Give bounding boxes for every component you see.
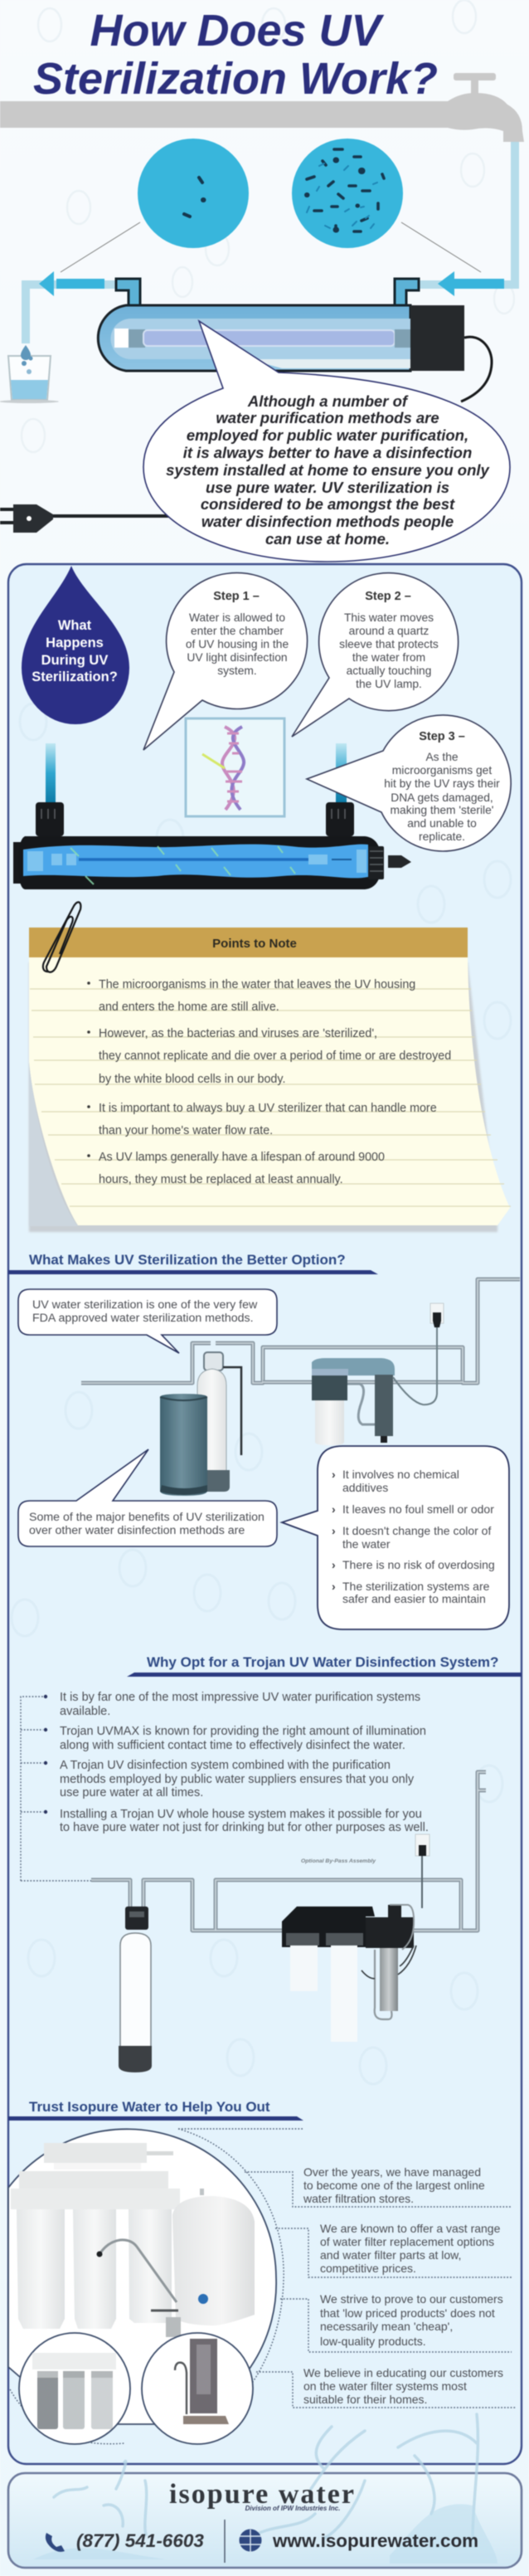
illustration: UV beam tubes <box>46 743 347 803</box>
illustration: simple UV chamber <box>98 279 492 402</box>
panel: points to note: than your home's water flow rate. <box>99 1124 273 1137</box>
text block: replacement options: competitive prices. <box>320 2262 416 2275</box>
icon: water drop heading: During UV <box>41 653 108 668</box>
panel: points to note: It is important to always buy a UV sterilizer that can handle more <box>99 1102 437 1115</box>
text block: Trojan bullet list: along with sufficient contact time to effectively disinfect the water. <box>60 1739 405 1752</box>
callout: step 3: microorganisms get <box>392 764 492 777</box>
title: Sterilization Work? <box>33 54 438 104</box>
text block: educating customers: on the water filter systems most <box>303 2379 467 2393</box>
callout: benefits list: › <box>332 1580 336 1593</box>
heading: what makes UV better <box>8 1252 378 1274</box>
illustration: DNA strand damaged by UV <box>186 718 284 816</box>
callout: step 1: Water is allowed to <box>189 611 285 624</box>
callout: step 1: enter the chamber <box>191 625 284 637</box>
callout: step 3: making them 'sterile' <box>391 804 493 816</box>
callout: step 3: replicate. <box>419 830 465 843</box>
text block: replacement options: We are known to offer a vast range <box>320 2222 501 2235</box>
callout: intro speech bubble: use pure water. UV sterilization is <box>206 479 449 496</box>
callout: step 3: hit by the UV rays their <box>384 777 500 790</box>
callout: benefits list: The sterilization systems are <box>342 1580 490 1593</box>
callout: benefits list: It leaves no foul smell or odor <box>342 1502 494 1516</box>
text block: low priced products: We strive to prove to our customers <box>320 2292 503 2306</box>
icon: paperclip <box>43 902 80 972</box>
callout: FDA approved: FDA approved water sterilization methods. <box>32 1312 254 1325</box>
callout: intro speech bubble: water purification methods are <box>216 409 439 426</box>
callout: intro speech bubble: can use at home. <box>265 530 390 548</box>
callout: step 2: This water moves <box>344 611 434 624</box>
callout: benefits list <box>282 1446 509 1629</box>
heading: trust Isopure: Trust Isopure Water to Help You Out <box>29 2099 270 2115</box>
icon: water drop heading: What <box>58 618 92 633</box>
callout: benefits list: › <box>332 1468 336 1481</box>
illustration: reverse osmosis system circle <box>8 2129 276 2424</box>
text block: isopure store size <box>245 2165 512 2207</box>
text block: replacement options: of water filter replacement options <box>320 2235 494 2248</box>
callout: step 2: the water from <box>352 651 425 664</box>
callout: intro speech bubble: considered to be amongst the best <box>201 495 455 513</box>
callout: benefits list: › <box>332 1524 336 1537</box>
heading: why opt for Trojan <box>127 1654 522 1677</box>
panel: points to note: The microorganisms in the water that leaves the UV housing <box>99 978 415 991</box>
title: How Does UV <box>90 6 385 56</box>
callout: intro speech bubble: it is always better to have a disinfection <box>183 444 472 461</box>
text block: Trojan bullet list: methods employed by public water suppliers ensures that you only <box>60 1773 415 1786</box>
text block: educating customers: We believe in educating our customers <box>303 2366 503 2379</box>
callout: step 2: Step 2 – <box>365 590 411 603</box>
callout: step 1: of UV housing in the <box>186 638 289 650</box>
contact: website: www.isopurewater.com <box>272 2530 478 2551</box>
callout: major benefits: Some of the major benefits of UV sterilization <box>29 1511 264 1524</box>
magnified view: treated water with few germs <box>138 139 249 248</box>
callout: step 2: sleeve that protects <box>339 638 439 650</box>
text block: low priced products: necessarily mean 'cheap', <box>320 2320 453 2333</box>
callout: FDA approved: UV water sterilization is one of the very few <box>32 1298 258 1312</box>
icon: water drop heading: Happens <box>46 635 104 650</box>
callout: benefits list: There is no risk of overdosing <box>342 1558 495 1571</box>
text block: replacement options: and water filter parts at low, <box>320 2248 461 2262</box>
text block: isopure store size: Over the years, we have managed <box>303 2165 481 2179</box>
magnified view: untreated water with many germs <box>292 139 403 248</box>
callout: step 3: As the <box>425 751 459 763</box>
illustration: Trojan whole house plumbing diagram <box>91 1772 486 2072</box>
illustration: three filter circle <box>19 2333 130 2444</box>
callout: benefits list: additives <box>342 1481 388 1494</box>
callout: benefits list: It doesn't change the color of <box>342 1524 491 1537</box>
callout: step 3: and unable to <box>407 817 477 830</box>
icon: water drop heading <box>22 566 129 724</box>
callout: step 2 <box>292 573 459 737</box>
illustration: softener and UV plumbing diagram <box>81 1279 520 1496</box>
text block: educating customers: suitable for their homes. <box>303 2393 427 2406</box>
panel: points to note: hours, they must be replaced at least annually. <box>99 1173 343 1186</box>
icon: water faucet and supply pipe <box>0 73 524 142</box>
callout: intro speech bubble: employed for public water purification, <box>187 426 468 444</box>
logo: isopure water: Division of IPW Industries Inc. <box>245 2505 340 2512</box>
icon: water drop heading: Sterilization? <box>32 670 118 684</box>
text block: isopure store size: water filtration stores. <box>303 2192 414 2205</box>
text block: Trojan bullet list: A Trojan UV disinfection system combined with the purification <box>60 1759 391 1772</box>
callout: step 1: UV light disinfection <box>187 651 288 664</box>
callout: intro speech bubble: system installed at home to ensure you only <box>166 461 491 479</box>
heading: why opt for Trojan: Why Opt for a Trojan UV Water Disinfection System? <box>147 1654 498 1670</box>
callout: step 1: system. <box>217 665 257 677</box>
text block: Trojan bullet list: use pure water at all times. <box>60 1786 203 1799</box>
illustration: countertop filter circle <box>142 2333 253 2444</box>
panel: points to note: by the white blood cells in our body. <box>99 1073 285 1086</box>
contact: phone number: (877) 541-6603 <box>76 2530 204 2551</box>
text block: Trojan bullet list: Installing a Trojan UV whole house system makes it possible for you <box>60 1808 422 1821</box>
panel: main content <box>8 564 522 2464</box>
panel: points to note: As UV lamps generally have a lifespan of around 9000 <box>99 1151 385 1164</box>
text block: Trojan bullet list: to have pure water not just for drinking but for other purposes as well. <box>60 1821 429 1834</box>
heading: what makes UV better: What Makes UV Sterilization the Better Option? <box>29 1252 346 1268</box>
panel: points to note: However, as the bacterias and viruses are 'sterilized', <box>99 1027 377 1040</box>
text block: low priced products <box>280 2292 512 2352</box>
panel: points to note: Points to Note <box>212 937 297 951</box>
callout: step 2: around a quartz <box>349 625 429 637</box>
pointer lines from magnified views <box>61 222 481 272</box>
callout: major benefits <box>18 1449 277 1546</box>
icon: power plug and cord <box>0 504 170 533</box>
callout: benefits list: › <box>332 1502 336 1516</box>
panel: footer <box>8 2473 522 2568</box>
illustration: Trojan whole house plumbing diagram: Optional By-Pass Assembly <box>301 1858 376 1864</box>
illustration: water splash <box>54 2414 478 2539</box>
text block: Trojan bullet list: available. <box>60 1705 110 1718</box>
callout: step 3: Step 3 – <box>419 730 465 743</box>
water flow pipes and arrows <box>26 142 515 343</box>
text block: low priced products: that 'low priced products' does not <box>320 2306 495 2320</box>
callout: major benefits: over other water disinfection methods are <box>29 1524 245 1537</box>
text block: Trojan bullet list: Trojan UVMAX is known for providing the right amount of illumination <box>60 1725 426 1738</box>
callout: benefits list: › <box>332 1558 336 1571</box>
text block: Trojan bullet list <box>21 1691 429 1881</box>
logo: isopure water: isopure water <box>169 2479 354 2510</box>
title <box>33 6 438 104</box>
callout: FDA approved <box>18 1289 277 1353</box>
callout: benefits list: It involves no chemical <box>342 1468 459 1481</box>
text block: low priced products: low-quality products. <box>320 2335 426 2348</box>
callout: step 1 <box>143 572 308 750</box>
callout: step 1: Step 1 – <box>213 590 260 603</box>
text block: Trojan bullet list: It is by far one of the most impressive UV water purification systems <box>60 1691 420 1704</box>
panel: points to note <box>29 928 511 1232</box>
callout: benefits list: safer and easier to maintain <box>342 1592 486 1605</box>
heading: trust Isopure <box>8 2099 303 2121</box>
panel: points to note: they cannot replicate and die over a period of time or are destroyed <box>99 1049 451 1063</box>
callout: step 3 <box>307 715 511 851</box>
text block: educating customers <box>256 2366 516 2408</box>
callout: benefits list: the water <box>342 1537 391 1551</box>
icon: glass of water with drops <box>0 345 59 403</box>
text block: isopure store size: to become one of the largest online <box>303 2179 485 2192</box>
illustration: dotted ring around product circle <box>10 2129 284 2444</box>
callout: intro speech bubble: water disinfection methods people <box>201 513 454 530</box>
panel: points to note: and enters the home are still alive. <box>99 1001 279 1014</box>
illustration: UV sterilizer unit <box>13 802 411 889</box>
callout: step 2: actually touching <box>347 665 431 677</box>
callout: step 3: DNA gets damaged, <box>391 791 493 804</box>
callout: step 2: the UV lamp. <box>356 678 422 690</box>
callout: intro speech bubble: Although a number of <box>247 392 409 410</box>
callout: intro speech bubble <box>143 321 510 562</box>
text block: replacement options <box>275 2222 512 2277</box>
